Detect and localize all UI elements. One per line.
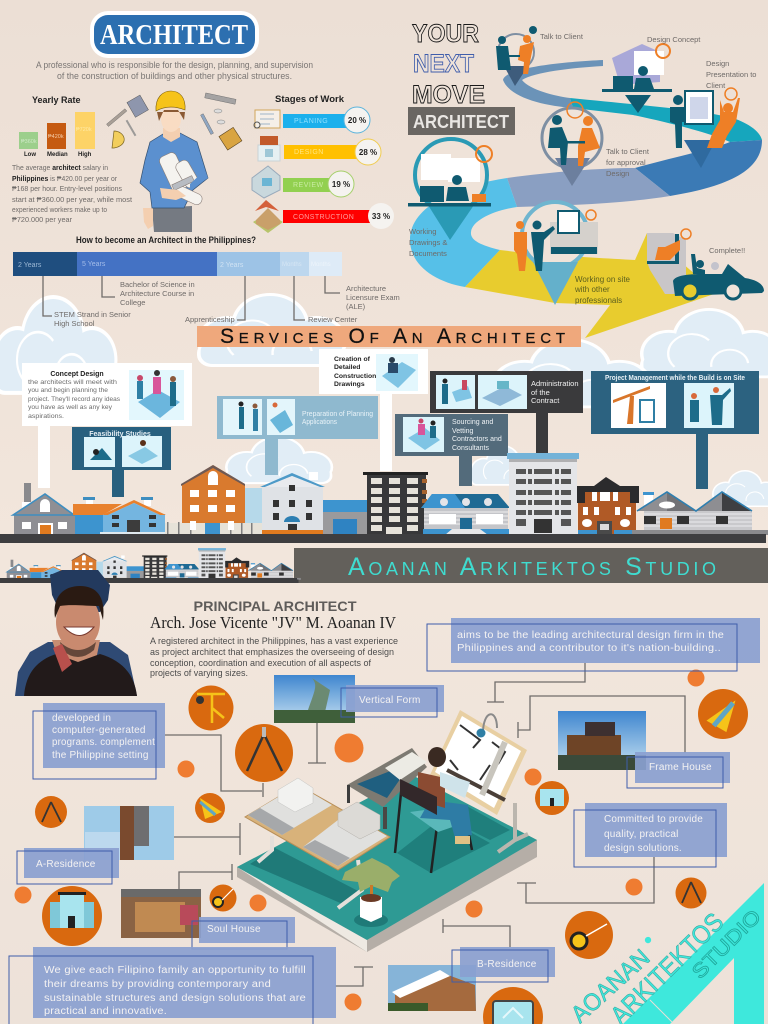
billboard: sourcing and vetting: Consultants	[452, 445, 489, 452]
cloud center	[197, 293, 347, 367]
callout: computer-generated programs	[33, 703, 165, 779]
studio logo: STUDIO	[688, 906, 766, 984]
bar: construction: 33 %	[372, 212, 390, 221]
callout: committed: design solutions.	[604, 843, 682, 854]
billboard: concept design: aspirations.	[28, 413, 64, 420]
billboard: feasibility studies	[72, 427, 171, 497]
label: soul house	[192, 917, 295, 949]
timeline callouts: (ALE)	[346, 302, 366, 311]
salary paragraph	[12, 163, 133, 224]
label: b-residence	[452, 947, 555, 982]
callout: computer-generated programs: developed in	[52, 713, 111, 724]
pin: working drawings: Drawings &	[409, 238, 447, 247]
callout: committed: Committed to provide	[604, 814, 703, 825]
your next move heading: NEXT	[413, 50, 474, 78]
cloud left	[0, 295, 117, 395]
billboard: sourcing and vetting: Vetting	[452, 428, 474, 435]
icon: tape small	[210, 884, 236, 912]
isometric desk scene	[237, 710, 537, 952]
pin: working on site	[514, 202, 631, 305]
yearly rate chart: ₱720k	[76, 127, 92, 133]
pin: design presentation: Presentation to	[706, 70, 756, 79]
yearly rate chart: ₱360k	[21, 139, 37, 145]
pin: working drawings	[408, 139, 492, 258]
cloud middle right	[492, 338, 652, 408]
timeline callouts: Architecture Course in	[120, 289, 194, 298]
architect label box: ARCHITECT	[413, 112, 509, 132]
timeline bar	[13, 252, 342, 276]
callout: mission statement: their dreams by providing contemporary and	[44, 979, 271, 990]
yearly rate chart	[19, 95, 95, 158]
pin: talk to client for approval: Talk to Client	[606, 147, 650, 156]
studio banner	[294, 548, 768, 583]
timeline callouts: Review Center	[308, 315, 358, 324]
callout: computer-generated programs: programs. complement	[52, 737, 155, 748]
yearly rate chart: Yearly Rate	[32, 95, 81, 105]
principal architect bio: as project architect that emphasizes the overseeing of design	[150, 647, 394, 657]
billboard: project management: Project Management while the Build is on Site	[605, 375, 745, 382]
timeline callouts: Architecture	[346, 284, 386, 293]
label: vertical form	[341, 685, 444, 717]
callout: vision statement	[427, 618, 760, 671]
drafting board	[430, 710, 528, 852]
platform	[237, 775, 537, 952]
cloud right	[640, 308, 768, 378]
bar: construction	[283, 203, 394, 229]
stages of work	[252, 94, 394, 233]
salary paragraph: ₱168 per hour. Entry-level positions	[12, 184, 122, 193]
bar: construction: CONSTRUCTION	[293, 214, 354, 221]
pin: design presentation: Design	[706, 59, 729, 68]
photo: b-residence	[388, 965, 476, 1011]
callout: committed	[574, 803, 727, 867]
studio banner: Aoanan Arkitektos Studio	[348, 553, 716, 581]
house 1	[13, 483, 75, 535]
callout: computer-generated programs: computer-generated	[52, 725, 146, 736]
definition text: of the construction of buildings and other physical structures.	[57, 71, 292, 81]
icon: t-square	[188, 686, 234, 730]
billboard: feasibility studies: Feasibility Studies	[89, 431, 151, 438]
billboard: concept design	[22, 363, 192, 488]
bar: planning: 20 %	[348, 116, 366, 125]
icon: design shop	[258, 136, 280, 161]
floating tools	[107, 93, 242, 150]
billboard: concept design: project. They'll record any ideas	[28, 396, 120, 403]
orange building	[181, 465, 245, 530]
billboard: sourcing and vetting: Contractors and	[452, 436, 502, 443]
timeline bar: 5 Years	[82, 261, 106, 268]
pin: design concept	[602, 35, 701, 113]
model table	[245, 778, 390, 908]
complete: house and car: Complete!!	[709, 246, 745, 255]
salary paragraph: experienced workers make up to	[12, 205, 107, 214]
icon: compass right	[676, 878, 706, 908]
icon: building circle	[42, 886, 102, 946]
photo: vertical form	[274, 675, 355, 723]
timeline callouts: College	[120, 298, 145, 307]
timeline callouts: Licensure Exam	[346, 293, 400, 302]
callout: mission statement: We give each Filipino family an opportunity to fulfill	[44, 965, 306, 976]
cloud low right	[712, 470, 768, 507]
mini skyline	[1, 548, 301, 583]
icon: construction house	[253, 200, 283, 233]
blue roof house	[421, 494, 510, 535]
billboard: administration of the contract	[430, 371, 583, 454]
billboard: creation of detailed construction drawings	[319, 349, 428, 471]
brown house	[577, 477, 639, 535]
studio logo: •	[637, 928, 659, 952]
label: a-residence	[17, 848, 119, 884]
billboard: administration of the contract: Administration	[531, 379, 579, 388]
photo: a-residence	[84, 806, 174, 860]
garage	[323, 500, 368, 535]
light blue back building	[245, 488, 263, 523]
principal architect heading	[150, 598, 397, 632]
pin: working drawings: Working	[409, 227, 436, 236]
heading: how to become: How to become an Architect in the Philippines?	[76, 235, 256, 246]
your next move heading	[412, 20, 485, 109]
bar: review	[283, 171, 354, 197]
road	[0, 534, 766, 543]
yearly rate chart: High	[78, 152, 92, 158]
label: soul house: Soul House	[207, 924, 261, 935]
complete: house and car	[647, 229, 764, 299]
callout: committed: quality, practical	[604, 829, 679, 840]
yearly rate chart: Low	[24, 152, 36, 158]
pin: working on site: Working on site	[575, 275, 631, 284]
icon: review room	[252, 166, 280, 198]
label: frame house	[627, 752, 730, 788]
architect label box	[408, 107, 515, 135]
winding road	[410, 60, 762, 338]
pin: talk to client	[496, 26, 584, 86]
principal architect heading: Arch. Jose Vicente "JV" M. Aoanan IV	[150, 613, 397, 632]
callout: computer-generated programs: the Philippine setting	[52, 750, 149, 761]
pin: talk to client for approval: Design	[606, 169, 629, 178]
billboard: creation of detailed construction drawings: Creation of	[334, 356, 371, 363]
timeline bar: Months	[311, 262, 331, 268]
timeline bar: 2 Years	[220, 262, 244, 269]
pin: talk to client for approval	[542, 102, 650, 186]
salary paragraph: Philippines is ₱420.00 per year or	[12, 174, 117, 183]
white house	[260, 472, 325, 535]
your next move heading: MOVE	[412, 81, 485, 109]
photo: soul house	[121, 889, 201, 938]
timeline callouts	[43, 276, 400, 328]
bar: design	[284, 139, 381, 165]
title badge: ARCHITECT	[100, 20, 248, 51]
timeline callouts: High School	[54, 319, 95, 328]
bar: design: 28 %	[359, 148, 377, 157]
timeline bar: 2 Years	[18, 262, 42, 269]
bar: planning: PLANING	[294, 118, 328, 125]
black tower	[363, 472, 428, 535]
house 2	[73, 497, 168, 535]
icon: protractor small	[195, 793, 225, 823]
timeline callouts: Apprenticeship	[185, 315, 235, 324]
salary paragraph: The average architect salary in	[12, 163, 108, 172]
callout: mission statement	[9, 947, 336, 1024]
principal architect bio: conception, coordination and execution of all aspects of	[150, 658, 371, 668]
callout: vision statement: aims to be the leading architectural design firm in the	[457, 630, 724, 641]
timeline callouts: Bachelor of Science in	[120, 280, 195, 289]
billboard: preparation of planning applications: Preparation of Planning	[302, 409, 373, 418]
bar: review: 19 %	[332, 180, 350, 189]
plant	[342, 858, 400, 927]
icon: protractor right	[698, 689, 748, 739]
salary paragraph: ₱720.000 per year	[12, 215, 72, 224]
billboard: sourcing and vetting: Sourcing and	[452, 419, 493, 426]
pin: design presentation	[670, 59, 756, 168]
your next move heading: YOUR	[412, 20, 479, 48]
fence	[165, 522, 262, 535]
principal architect heading: PRINCIPAL ARCHITECT	[194, 598, 357, 614]
billboard: creation of detailed construction drawings: Construction	[334, 373, 376, 380]
icon: compass small left	[35, 796, 67, 828]
studio logo	[566, 883, 766, 1024]
pin: talk to client: Talk to Client	[540, 32, 584, 41]
bar: planning	[283, 107, 370, 133]
timeline callouts: STEM Strand in Senior	[54, 310, 131, 319]
billboard: preparation of planning applications: Applications	[302, 417, 337, 426]
cloud low center	[225, 436, 333, 484]
billboard: concept design: you and begin planning the	[28, 387, 109, 394]
principal architect bio	[150, 636, 398, 678]
cloud low middle	[470, 445, 538, 486]
principal architect bio: projects of varying sizes.	[150, 668, 248, 678]
callout: mission statement: practical and innovative.	[44, 1006, 167, 1017]
services banner: Services Of An Architect	[220, 325, 565, 348]
salary paragraph: start at ₱360.00 per year, while most	[12, 195, 133, 204]
pin: design concept: Design Concept	[647, 35, 701, 44]
pin: working on site: professionals	[575, 296, 622, 305]
draftsman and chair	[395, 747, 472, 873]
icon: building small	[535, 781, 569, 815]
bar: design: DESIGN	[294, 149, 324, 156]
yearly rate chart: Median	[47, 152, 68, 158]
principal architect bio: A registered architect in the Philippines, has a vast experience	[150, 636, 398, 646]
architect character	[140, 91, 208, 232]
definition text: A professional who is responsible for the design, planning, and supervision	[36, 60, 313, 70]
icon: house screen	[483, 987, 543, 1024]
back table	[347, 748, 427, 829]
stages of work: Stages of Work	[275, 94, 345, 105]
billboard: administration of the contract: Contract	[531, 396, 560, 405]
gray roof house	[632, 492, 768, 535]
billboard: preparation of planning applications	[217, 396, 378, 475]
portrait of principal architect	[15, 570, 137, 696]
billboard: administration of the contract: of the	[531, 388, 550, 397]
pin: design presentation: Client	[706, 81, 726, 90]
callout: vision statement: Philippines and a contributor to it's nation-building..	[457, 643, 721, 654]
white tower	[507, 453, 579, 535]
label: b-residence: B-Residence	[477, 959, 537, 970]
photo: frame house	[558, 711, 646, 770]
pin: working drawings: Documents	[409, 249, 447, 258]
callout: mission statement: sustainable structures and design solutions that are	[44, 993, 306, 1004]
connector lines	[165, 663, 685, 986]
accent dots	[14, 670, 704, 1010]
billboard: concept design: you have as well as any key	[28, 404, 113, 411]
timeline bar: Months	[282, 262, 302, 268]
icon: planning blueprint	[254, 110, 280, 128]
yearly rate chart: ₱420k	[48, 134, 64, 140]
billboard: concept design: the architects will meet with	[28, 379, 118, 386]
billboard: project management	[591, 371, 759, 489]
icon: tape right	[565, 911, 613, 959]
city skyline	[0, 453, 768, 543]
pin: working on site: with other	[574, 285, 610, 294]
label: vertical form: Vertical Form	[359, 695, 421, 706]
billboard: sourcing and vetting	[395, 414, 508, 486]
billboard: creation of detailed construction drawings: Detailed	[334, 364, 360, 371]
billboard: concept design: Concept Design	[50, 371, 104, 378]
icon: compass large	[235, 724, 293, 782]
label: a-residence: A-Residence	[36, 859, 96, 870]
pin: talk to client for approval: for approval	[606, 158, 646, 167]
title badge	[90, 11, 259, 58]
definition text	[36, 60, 313, 81]
bar: review: REVIEW	[293, 182, 324, 189]
label: frame house: Frame House	[649, 762, 712, 773]
billboard: creation of detailed construction drawings: Drawings	[334, 381, 365, 388]
